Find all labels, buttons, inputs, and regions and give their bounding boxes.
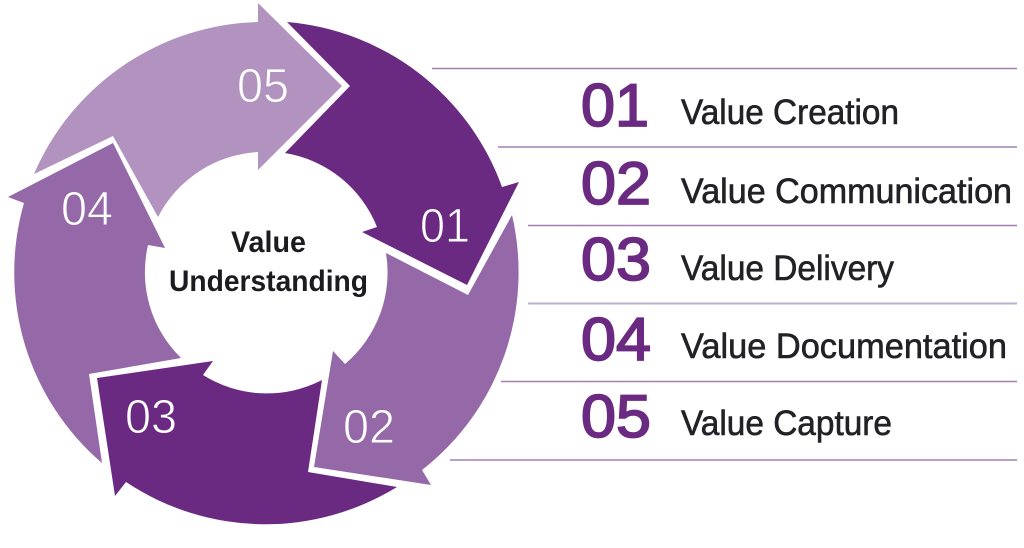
item 05: Value Capture — [681, 404, 892, 443]
arrow 04 — [8, 143, 181, 463]
arrow 05 — [34, 3, 342, 217]
item 03: 03 — [581, 226, 651, 293]
arrow 02: 02 — [343, 401, 395, 454]
item 04: Value Documentation — [681, 327, 1007, 366]
item 04 — [581, 306, 1007, 373]
center label: Understanding — [169, 265, 368, 298]
arrow 02 — [314, 215, 519, 485]
arrow 03 — [97, 361, 397, 524]
item 03: Value Delivery — [681, 249, 894, 288]
item 05 — [581, 383, 892, 450]
cycle diagram — [8, 3, 519, 524]
arrow 01 — [285, 22, 519, 285]
item 05: 05 — [581, 383, 651, 450]
arrow 03: 03 — [125, 391, 177, 444]
item 01: 01 — [581, 72, 649, 139]
list of value steps — [581, 72, 1012, 450]
item 02: Value Communication — [681, 172, 1012, 211]
item 01 — [581, 72, 899, 139]
item 04: 04 — [581, 306, 651, 373]
item 02: 02 — [581, 150, 651, 217]
center label: Value — [231, 226, 306, 259]
item 01: Value Creation — [681, 93, 899, 132]
arrow 01: 01 — [420, 200, 470, 253]
item 03 — [581, 226, 894, 293]
arrow 05: 05 — [237, 60, 289, 113]
arrow 04: 04 — [61, 183, 113, 236]
item 02 — [581, 150, 1012, 217]
